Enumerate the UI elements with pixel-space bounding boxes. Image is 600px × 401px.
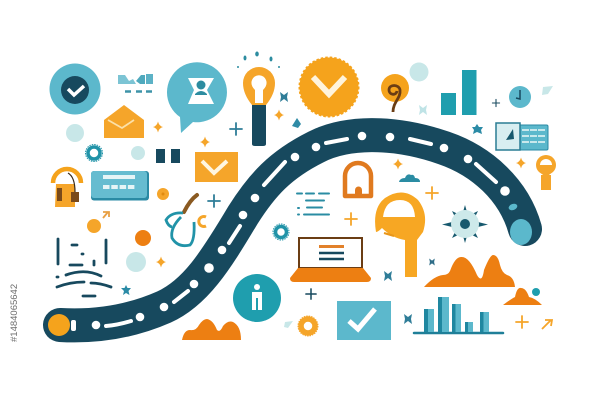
plus bbox=[306, 289, 316, 299]
icon: lightbulb bbox=[237, 52, 280, 146]
icon: laptop bbox=[290, 238, 371, 282]
plus bbox=[516, 316, 528, 328]
icon: person circle bbox=[233, 274, 281, 322]
scattered lines icon bbox=[57, 239, 111, 296]
orange circle bbox=[135, 230, 151, 246]
orange mountains bbox=[424, 255, 515, 287]
bow tie marker bbox=[280, 92, 288, 102]
icon: check circle bbox=[50, 64, 100, 114]
pale leaf bbox=[284, 321, 293, 328]
icon: eye gear bbox=[442, 205, 488, 243]
star bbox=[472, 124, 483, 134]
sparkle bbox=[153, 122, 163, 132]
pale circle bbox=[410, 62, 428, 82]
orange dot bbox=[157, 188, 169, 200]
icon: open envelope bbox=[104, 105, 144, 138]
star bbox=[121, 285, 131, 295]
icon: mail with check bbox=[195, 152, 238, 182]
orange c mark bbox=[199, 216, 206, 226]
icon: card bbox=[91, 171, 149, 200]
bow tie marker bbox=[384, 271, 392, 281]
icon: hook and brush bbox=[166, 195, 197, 246]
icon: speech bubble with person bbox=[167, 62, 227, 133]
bow tie marker bbox=[404, 314, 412, 324]
icon: orange gear ring bbox=[298, 316, 318, 336]
icon: gear badge with check bbox=[300, 58, 358, 116]
sparkle bbox=[156, 256, 166, 268]
icon: big orange key bbox=[375, 192, 425, 277]
sparkle bbox=[516, 158, 526, 168]
icon: keyhole arch bbox=[345, 163, 371, 196]
orange dot with arrow bbox=[87, 212, 109, 233]
sparkle bbox=[274, 110, 284, 120]
text lines icon bbox=[297, 194, 329, 214]
orange cloud bbox=[182, 319, 241, 340]
icon: right key bbox=[536, 155, 556, 190]
bow tie marker bbox=[419, 105, 427, 115]
plus bbox=[230, 123, 242, 135]
icon: teal gear ring bbox=[273, 224, 289, 240]
icon: check box bbox=[337, 301, 391, 340]
icon: clock bbox=[509, 86, 531, 108]
plus bbox=[492, 99, 500, 107]
plus bbox=[426, 187, 438, 199]
pale circle bbox=[131, 146, 145, 160]
pale circle bbox=[66, 124, 84, 142]
icon: headset bbox=[53, 169, 81, 207]
bar chart: baseline bars bbox=[414, 297, 503, 333]
icon: tablet with table bbox=[496, 123, 548, 150]
sparkle bbox=[200, 136, 210, 148]
icon: pause blocks bbox=[156, 149, 180, 163]
plus bbox=[208, 195, 220, 207]
plus bbox=[345, 213, 357, 225]
icon: teal gear ring bbox=[86, 144, 102, 162]
cloud small bbox=[399, 174, 420, 182]
icon: small chart bbox=[118, 74, 153, 92]
small orange mountain with dot bbox=[503, 288, 542, 305]
road bbox=[48, 132, 532, 336]
small leaf mark bbox=[292, 118, 301, 128]
stock id text: #1484065642 bbox=[9, 284, 20, 342]
arrow bbox=[542, 320, 552, 329]
pale circle bbox=[126, 252, 146, 272]
pale leaf bbox=[542, 86, 553, 95]
bow tie marker bbox=[429, 258, 435, 266]
bar chart: teal bars bbox=[441, 70, 476, 115]
icon: key ring bbox=[381, 74, 409, 112]
sparkle bbox=[393, 158, 403, 170]
